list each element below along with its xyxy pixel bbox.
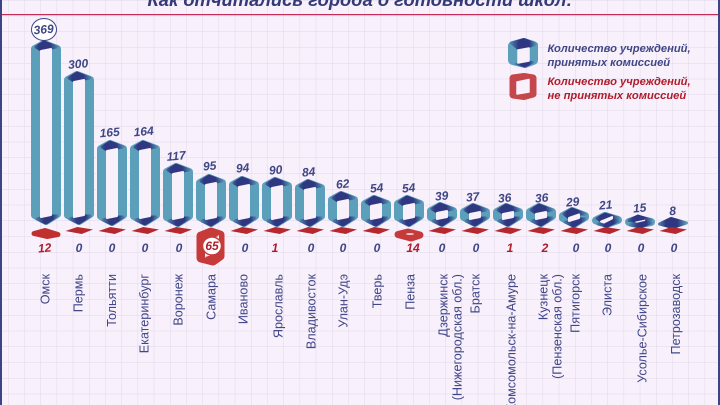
- marker: Пенза 14: [398, 232, 420, 238]
- city: Ярославль: Ярославль: [272, 274, 286, 338]
- bar: Пермь 300: [68, 73, 90, 223]
- city: Омск: Омск: [38, 274, 52, 304]
- city: Пятигорск: Пятигорск: [568, 274, 582, 333]
- value: 36: 36: [534, 190, 549, 206]
- marker: Омск 12: [34, 230, 58, 236]
- marker: Кузнецк: [528, 227, 555, 234]
- bar: Улан-Удэ 62: [332, 193, 354, 225]
- marker: Тольятти: [98, 227, 126, 234]
- rejected: Владивосток: 0: [308, 241, 315, 255]
- value: 36: 36: [497, 190, 512, 206]
- marker: Екатеринбург: [132, 227, 159, 234]
- city: Кузнецк: Кузнецк: [536, 274, 550, 320]
- rejected-institutions markers: [34, 227, 687, 264]
- city: Улан-Удэ: Улан-Удэ: [336, 274, 350, 328]
- city: Пермь: Пермь: [72, 274, 86, 312]
- bar: Кузнецк 36: [530, 205, 552, 225]
- city: Пенза: Пенза: [404, 274, 418, 310]
- value: 94: 94: [235, 160, 250, 176]
- city note: Пензенская обл.: (Пензенская обл.): [550, 274, 564, 379]
- value callout: 369: [32, 18, 56, 40]
- value: 117: 117: [166, 148, 188, 164]
- accepted value labels: [32, 18, 677, 218]
- value: 37: 37: [465, 189, 481, 205]
- rejected: Пенза: 14: [406, 241, 420, 255]
- value: 165: 165: [99, 125, 121, 140]
- marker: Комсомольск-на-Амуре: [494, 227, 522, 234]
- rejected: Омск: 12: [37, 240, 52, 256]
- legend icon: rejected: [513, 76, 533, 96]
- value: 95: 95: [202, 158, 217, 174]
- rejected: Дзержинск: 0: [439, 241, 446, 255]
- value: 90: 90: [268, 162, 283, 178]
- marker: Элиста: [594, 227, 621, 234]
- marker: Владивосток: [296, 227, 324, 234]
- rejected: Тольятти: 0: [109, 241, 116, 255]
- legend text: rejected: не принятых комиссией: [548, 90, 686, 102]
- bar chart: accepted institutions: [35, 42, 686, 228]
- legend text: accepted: принятых комиссией: [548, 57, 670, 69]
- marker: Иваново: [230, 227, 258, 234]
- bar: Элиста 21: [596, 214, 618, 226]
- legend text: accepted: Количество учреждений,: [548, 43, 691, 55]
- rejected: Воронеж: 0: [176, 241, 183, 255]
- rejected: Комсомольск-на-Амуре: 1: [507, 241, 514, 255]
- city: Тольятти: Тольятти: [105, 274, 119, 327]
- marker: Усолье-Сибирское: [626, 227, 654, 234]
- rejected value labels: [37, 240, 678, 256]
- marker: Ярославль: [264, 227, 291, 234]
- bar: Дзержинск 39: [431, 204, 453, 225]
- rejected: Иваново: 0: [242, 241, 249, 255]
- marker: Братск: [462, 227, 489, 234]
- value: 54: 54: [369, 180, 384, 196]
- title rule: [2, 14, 718, 15]
- rejected: Пятигорск: 0: [573, 241, 580, 255]
- bar: Екатеринбург 164: [134, 142, 156, 224]
- bar: Омск 369: [35, 42, 57, 223]
- bar: Петрозаводск 8: [660, 218, 686, 228]
- bar: Комсомольск-на-Амуре 36: [497, 205, 519, 225]
- rejected: Братск: 0: [473, 241, 480, 255]
- value: 39: 39: [434, 188, 449, 204]
- legend icon: accepted: [511, 39, 537, 67]
- city: Воронеж: Воронеж: [172, 273, 186, 326]
- city note: Нижегородская обл.: (Нижегородская обл.): [450, 274, 464, 400]
- bar: Усолье-Сибирское 15: [629, 216, 651, 227]
- city: Владивосток: Владивосток: [304, 274, 318, 349]
- bar: Владивосток 84: [299, 181, 321, 225]
- value: 164: 164: [133, 124, 155, 139]
- rejected: Кузнецк: 2: [541, 241, 549, 255]
- city: Элиста: Элиста: [600, 274, 614, 316]
- marker: Дзержинск: [428, 227, 456, 234]
- bar: Воронеж 117: [167, 165, 189, 225]
- city: Братск: Братск: [468, 274, 482, 313]
- rejected: Элиста: 0: [605, 241, 612, 255]
- bar: Братск 37: [464, 205, 486, 225]
- rejected: Тверь: 0: [374, 241, 381, 255]
- rejected: Улан-Удэ: 0: [340, 241, 347, 255]
- bar: Пенза 54: [398, 197, 420, 225]
- value: 84: 84: [301, 164, 316, 180]
- rejected: Екатеринбург: 0: [142, 241, 149, 255]
- bar: Пятигорск 29: [563, 209, 585, 226]
- value: 8: 8: [669, 204, 677, 218]
- city labels: [38, 273, 683, 405]
- rejected: Ярославль: 1: [272, 241, 279, 255]
- marker: Пятигорск: [560, 227, 588, 234]
- marker: Тверь: [362, 227, 390, 234]
- value: 62: 62: [335, 176, 350, 192]
- marker: Воронеж: [164, 227, 192, 234]
- bar: Самара 95: [200, 176, 222, 225]
- city: Екатеринбург: Екатеринбург: [138, 274, 152, 353]
- bar: Иваново 94: [233, 178, 255, 225]
- city: Тверь: Тверь: [370, 274, 384, 308]
- city: Усолье-Сибирское: Усолье-Сибирское: [636, 274, 650, 383]
- rejected: Пермь: 0: [76, 241, 83, 255]
- bar: Ярославль 90: [266, 179, 288, 225]
- value: 15: 15: [632, 200, 647, 216]
- marker: Пермь: [66, 227, 93, 234]
- value: 29: 29: [564, 194, 580, 210]
- right border: [718, 0, 720, 405]
- marker: Самара 65: [200, 232, 224, 264]
- value: 300: 300: [68, 56, 89, 72]
- rejected: Петрозаводск: 0: [671, 241, 678, 255]
- value: 54: 54: [401, 180, 416, 196]
- city: Иваново: Иваново: [236, 274, 250, 324]
- bar: Тверь 54: [365, 197, 387, 225]
- left border: [0, 0, 2, 405]
- marker: Петрозаводск: [660, 227, 687, 234]
- legend: [511, 39, 691, 102]
- city: Самара: Самара: [204, 274, 218, 320]
- legend text: rejected: Количество учреждений,: [548, 76, 691, 88]
- city: Дзержинск: Дзержинск: [436, 274, 450, 337]
- city: Петрозаводск: Петрозаводск: [669, 274, 683, 354]
- marker: Самара 65: 65: [205, 239, 219, 253]
- value: 21: 21: [597, 197, 613, 213]
- value callout: 369: 369: [33, 22, 55, 37]
- bar: Тольятти 165: [101, 142, 123, 224]
- rejected: Усолье-Сибирское: 0: [638, 241, 645, 255]
- marker: Улан-Удэ: [330, 227, 357, 234]
